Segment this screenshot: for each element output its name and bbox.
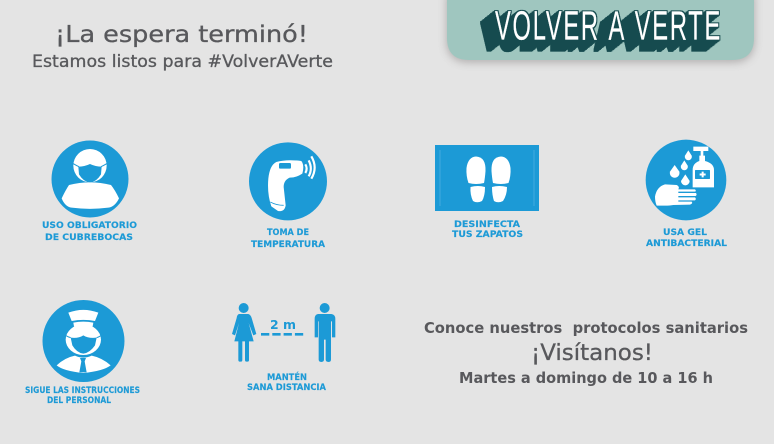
text: SANA DISTANCIA xyxy=(247,382,327,393)
label: mantén sana distancia: MANTÉN xyxy=(267,371,307,383)
callout: visit information: ¡Visítanos! xyxy=(531,340,653,366)
icon: two metre distance xyxy=(232,303,335,362)
man figure xyxy=(315,303,335,362)
heading: ¡La espera terminó! xyxy=(55,22,308,48)
callout: visit information: Martes a domingo de 10 a 16 h xyxy=(459,369,713,387)
callout: visit information xyxy=(424,319,748,387)
subheading: Estamos listos para #VolverAVerte xyxy=(32,52,333,71)
label: desinfecta: DESINFECTA xyxy=(454,219,521,230)
icon: hand sanitizer xyxy=(646,140,726,220)
distance label: 2 m xyxy=(270,317,296,332)
text: ANTIBACTERIAL xyxy=(646,238,727,249)
text: DEL PERSONAL xyxy=(47,395,111,406)
callout: visit information: Conoce nuestros protocolos sanitarios xyxy=(424,319,748,337)
icon: disinfecting mat xyxy=(435,145,539,211)
text: TUS ZAPATOS xyxy=(452,229,523,240)
icon: thermometer xyxy=(249,142,327,220)
icon: staff with cap and mask xyxy=(42,300,124,382)
text: DE CUBREBOCAS xyxy=(45,232,133,243)
icon: face mask person xyxy=(51,140,128,217)
banner: Volver a Verte xyxy=(446,0,755,63)
label: usa gel: USA GEL xyxy=(663,227,707,238)
label: toma de temperatura: TOMA DE xyxy=(267,227,309,238)
woman figure xyxy=(232,303,256,362)
label: uso obligatorio: USO OBLIGATORIO xyxy=(42,220,137,231)
text: TEMPERATURA xyxy=(251,239,326,250)
label: sigue las instrucciones: SIGUE LAS INSTRUCCIONES xyxy=(25,385,140,396)
